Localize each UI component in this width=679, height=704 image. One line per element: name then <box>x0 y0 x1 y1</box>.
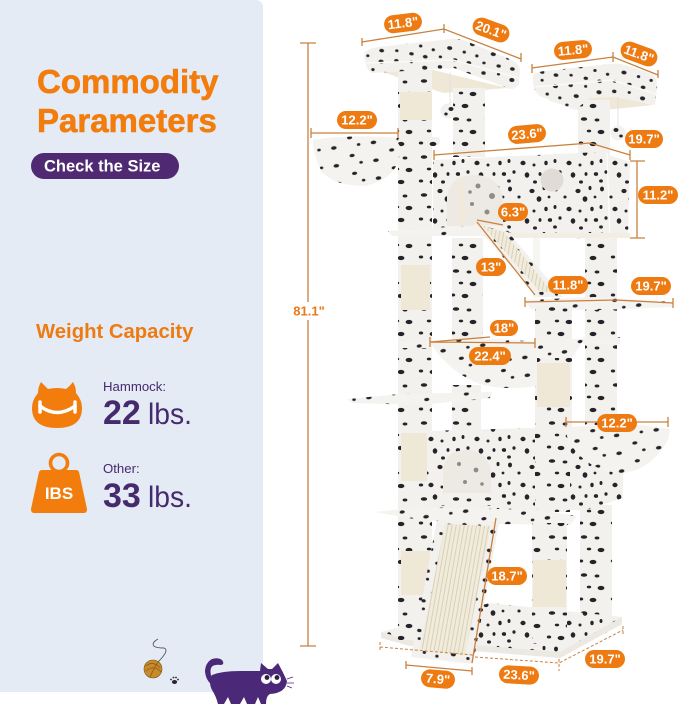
stat: other 33 lbs: Other: <box>103 461 140 476</box>
icon: cat eyes and whiskers <box>261 674 294 688</box>
center post <box>535 306 572 436</box>
dimension labels: 12.2" <box>601 416 633 430</box>
platform under upper condo <box>388 225 630 238</box>
dimension labels: 22.4" <box>474 348 506 364</box>
top left perch <box>364 39 520 89</box>
dimension labels: 19.7" <box>628 132 660 146</box>
illustration: cat tree <box>313 39 672 664</box>
middle rings <box>400 337 620 358</box>
icon: purple cat <box>205 658 287 704</box>
front post <box>532 523 567 643</box>
toy ball right <box>610 97 626 140</box>
main deck <box>375 507 577 525</box>
stat: other 33 lbs: lbs. <box>148 481 192 514</box>
dimension labels: 19.7" <box>589 652 621 666</box>
stat: hammock 22 lbs: lbs. <box>148 398 192 431</box>
badge: check the size <box>31 153 179 179</box>
base platform <box>381 603 622 658</box>
right perch underside <box>548 96 653 112</box>
panel: left background <box>0 0 263 692</box>
rear post upper right <box>578 100 610 155</box>
icon: weight <box>31 454 87 513</box>
top perch underside <box>383 70 507 93</box>
right shelf <box>525 297 672 310</box>
dimension labels: 11.8" <box>553 278 583 292</box>
rear post upper left <box>453 88 485 157</box>
dimension labels: 81.1" <box>293 304 325 318</box>
dimension labels: 23.6" <box>511 125 543 143</box>
title <box>37 63 219 139</box>
condo door interior <box>458 180 495 226</box>
top right perch <box>533 64 657 110</box>
top hammock <box>313 136 440 186</box>
dimension lines <box>300 24 673 675</box>
dimension labels: 23.6" <box>503 667 535 683</box>
dimension labels: 18" <box>494 320 514 336</box>
icon: yarn ball <box>144 639 166 678</box>
toy ball left <box>440 72 456 118</box>
left post <box>398 70 432 640</box>
dimension labels: 13" <box>481 260 501 274</box>
lower condo door spots <box>457 462 484 486</box>
title: Commodity <box>37 63 219 100</box>
dimension labels <box>290 12 678 689</box>
dimension labels: 7.9" <box>425 670 451 688</box>
right post mid <box>585 236 617 425</box>
center post lower upright <box>535 428 570 512</box>
dimension labels: 11.8" <box>557 41 589 59</box>
condo door <box>447 175 503 226</box>
lower hammock <box>565 424 670 473</box>
icon: paw print <box>170 677 179 684</box>
lower left shelf <box>347 392 492 405</box>
stat: hammock 22 lbs: Hammock: <box>103 379 166 394</box>
heading: weight capacity: Weight Capacity <box>36 321 194 343</box>
dimension labels: 20.1" <box>474 18 508 42</box>
stat: other 33 lbs <box>103 461 192 515</box>
lower condo floor <box>437 493 497 505</box>
lower ramp <box>411 520 499 664</box>
title: Parameters <box>37 102 217 139</box>
dimension labels: 19.7" <box>635 278 667 294</box>
stat: other 33 lbs: 33 <box>103 477 141 515</box>
rear post lower middle <box>452 385 481 430</box>
condo round hole <box>540 168 564 192</box>
lower condo <box>427 428 623 510</box>
icon: weight: IBS <box>45 484 73 503</box>
white support <box>533 238 540 298</box>
upper ramp <box>474 224 563 297</box>
rear post middle <box>452 238 483 345</box>
dimension labels: 12.2" <box>341 112 373 128</box>
icon: hammock cat head <box>32 382 82 428</box>
dimension labels: 11.2" <box>643 188 673 202</box>
upper condo <box>433 152 630 239</box>
stat: hammock 22 lbs <box>103 379 192 432</box>
dimension labels: 11.8" <box>387 14 419 32</box>
lower condo door <box>443 450 491 495</box>
dimension labels: 11.8" <box>622 42 656 66</box>
right post low <box>580 505 612 618</box>
stat: hammock 22 lbs: 22 <box>103 394 141 432</box>
dimension labels: 6.3" <box>501 204 525 220</box>
badge: check the size: Check the Size <box>44 158 160 176</box>
dimension labels: 18.7" <box>491 568 523 584</box>
center hammock <box>430 339 537 388</box>
